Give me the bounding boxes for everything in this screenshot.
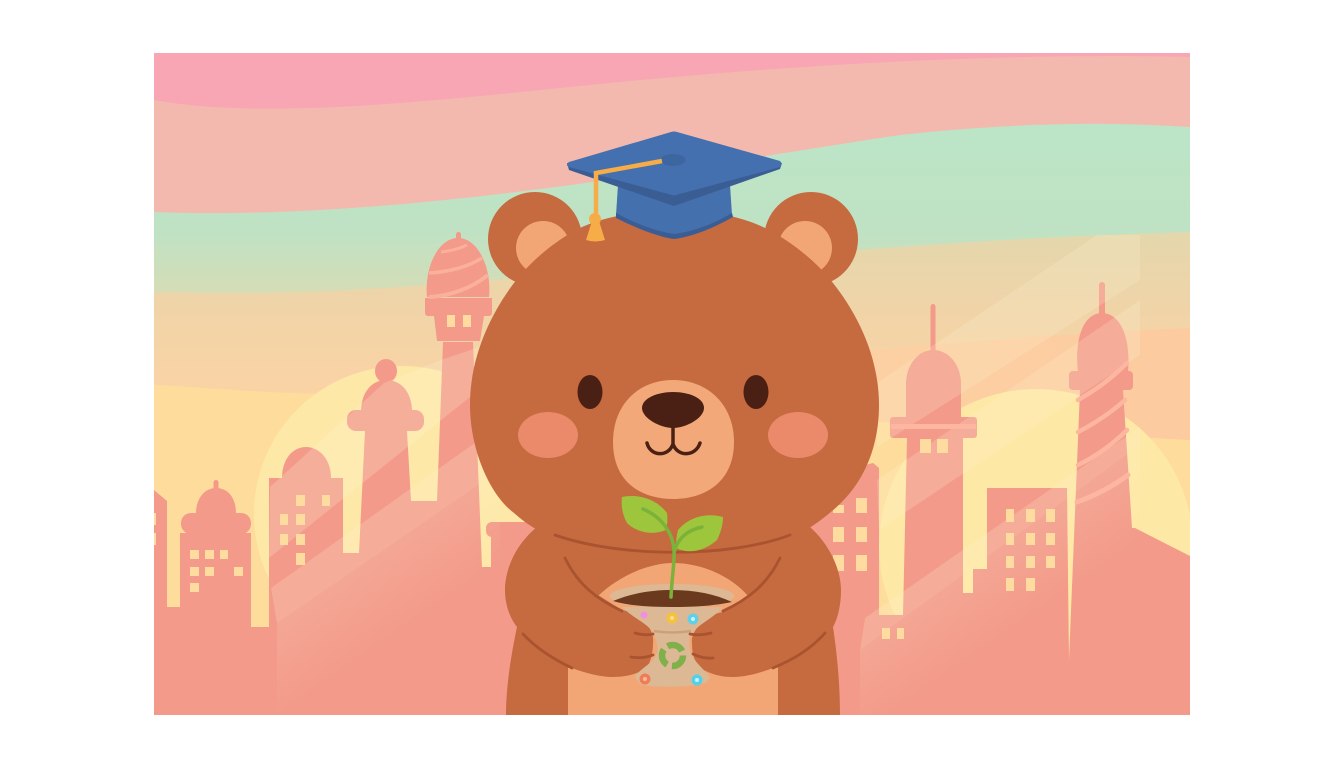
background: yellow base <box>154 385 1190 627</box>
bear nose <box>642 392 704 428</box>
background: tan wave <box>154 232 1190 394</box>
flower pot <box>610 584 734 687</box>
cap skull shadow <box>616 213 733 239</box>
tower: spiral <box>1069 282 1133 390</box>
stem <box>643 509 702 597</box>
bear character <box>470 192 879 715</box>
icon: recycling symbol <box>662 645 683 666</box>
background: peach wave <box>870 328 1190 440</box>
bear muzzle <box>613 380 734 499</box>
bear ear: left <box>488 192 582 286</box>
bear cheek: right <box>768 412 828 458</box>
bear body <box>505 527 841 715</box>
cap board <box>567 132 782 196</box>
flower: yellow <box>666 612 678 624</box>
tower: round knob <box>347 359 424 431</box>
sun: left <box>254 366 524 578</box>
flower: cyan <box>688 614 698 624</box>
leaf: left <box>622 496 667 533</box>
background: green wave <box>154 124 1190 293</box>
flower: pink <box>640 612 648 618</box>
windows <box>154 315 1055 639</box>
bear ear: right <box>764 192 858 286</box>
background: pink wave <box>154 53 1190 109</box>
cap skull <box>616 185 732 237</box>
building: small domed <box>181 480 251 534</box>
background: salmon wave <box>154 53 1190 213</box>
bear eye: left <box>578 375 602 409</box>
illustration: graduate bear holding a seedling before a pastel skyline <box>154 53 1190 715</box>
panel: scene background <box>154 53 1193 715</box>
building: domed left <box>282 447 331 478</box>
cap button <box>660 154 686 166</box>
pot rim <box>610 584 734 608</box>
seedling <box>622 496 723 597</box>
graduation cap <box>567 132 782 242</box>
pot band <box>654 631 691 632</box>
bear mouth <box>647 426 700 454</box>
light rays over skyline <box>269 235 1140 715</box>
tassel <box>586 161 662 242</box>
arm and chin crease lines <box>523 535 825 668</box>
leaf: right <box>676 515 723 551</box>
bear arm: left <box>568 596 654 677</box>
flower: cyan lower <box>692 674 702 686</box>
sun: right <box>879 389 1190 651</box>
bear head <box>470 211 879 554</box>
skyline silhouette: right <box>810 282 1190 715</box>
tower details <box>891 363 1128 502</box>
building: stub cap behind bear <box>486 522 536 537</box>
bear arm: right <box>692 596 778 677</box>
bear cheek: left <box>518 412 578 458</box>
cap board edge <box>567 163 782 206</box>
tower: striped dome left <box>425 232 492 341</box>
skyline silhouette: left <box>154 232 560 715</box>
flower: orange <box>640 674 650 684</box>
bear belly <box>568 563 778 715</box>
bear eye: right <box>744 375 768 409</box>
tower: cap tower <box>890 304 977 438</box>
pot soil <box>613 590 732 607</box>
